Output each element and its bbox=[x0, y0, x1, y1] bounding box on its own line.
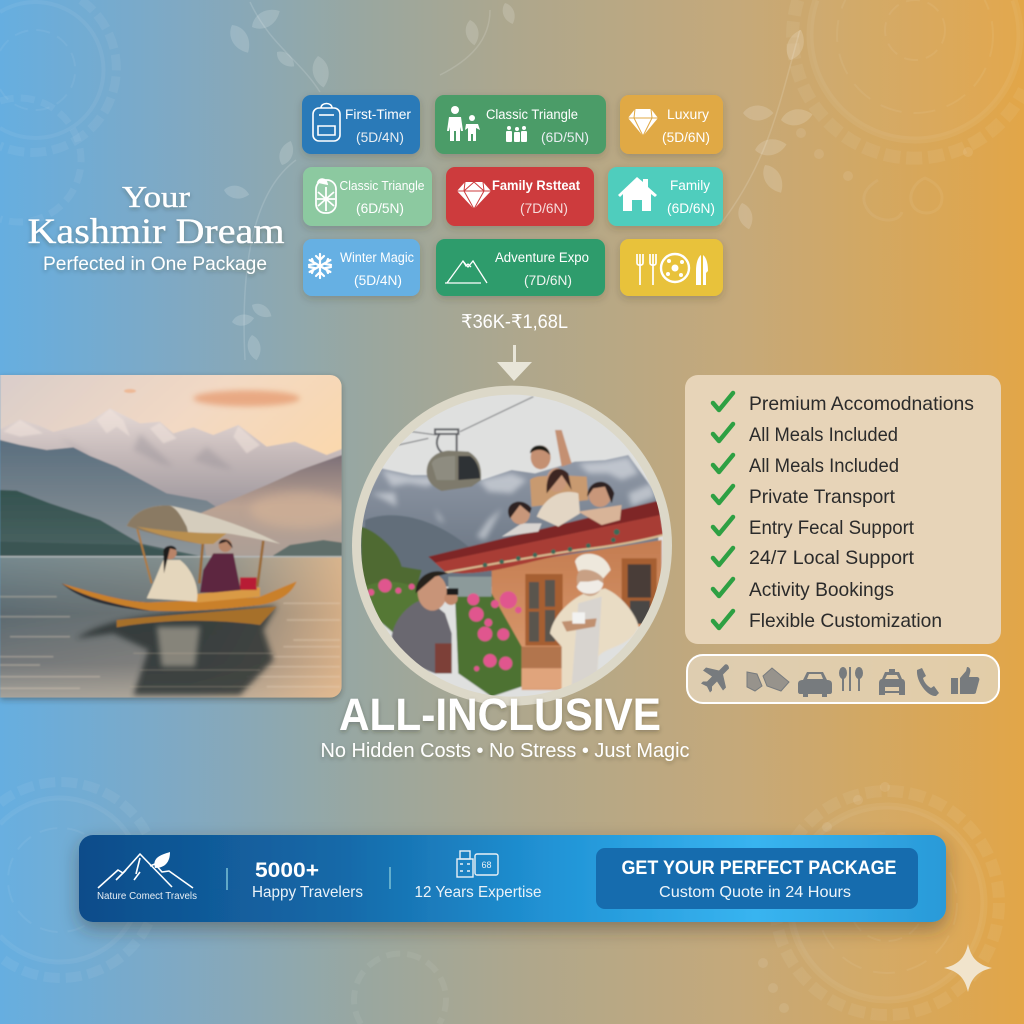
package tile: Luxury: (5D/6N) bbox=[662, 130, 710, 145]
sky bbox=[370, 394, 663, 696]
mid hills bbox=[0, 440, 233, 560]
photo ring bbox=[352, 386, 672, 706]
checklist text: Premium Accomodnations bbox=[749, 393, 974, 415]
checklist text: Private Transport bbox=[749, 486, 896, 508]
photo: shikara on the lake bbox=[0, 370, 350, 699]
sky bbox=[0, 374, 345, 456]
stat: happy travelers bbox=[252, 859, 363, 901]
icon: thumbs up bbox=[951, 667, 979, 694]
package tile: Adventure Expo: Adventure Expo bbox=[495, 250, 589, 265]
package tile: dining icon bbox=[620, 239, 723, 296]
package tile: Adventure Expo: (7D/6N) bbox=[524, 273, 572, 288]
stat: years expertise bbox=[414, 851, 542, 901]
passengers bbox=[147, 560, 198, 602]
icon: snowflake bbox=[309, 254, 331, 278]
shikara hull bbox=[62, 584, 150, 612]
title: Perfected in One Package bbox=[43, 253, 267, 275]
package tile: Classic Triangle bbox=[435, 95, 606, 154]
logo: Nature Connect Travels: Nature Comect Travels bbox=[97, 891, 197, 902]
window left bbox=[525, 574, 563, 646]
package tile: Classic Triangle: (6D/5N) bbox=[541, 130, 589, 145]
checklist text: All Meals Included bbox=[749, 424, 898, 446]
icon: fork, plate and knife bbox=[637, 254, 708, 285]
package tile: First-Timer: First-Timer bbox=[345, 107, 412, 122]
garden bbox=[367, 582, 420, 633]
stat: years expertise: 68 bbox=[481, 860, 492, 870]
icon: phone bbox=[917, 668, 939, 696]
stat: years expertise: 12 Years Expertise bbox=[414, 884, 542, 901]
package tile: Winter Magic: (5D/4N) bbox=[354, 273, 402, 288]
package tile: Family bbox=[608, 167, 723, 226]
checklist text: All Meals Included bbox=[749, 455, 899, 477]
woman with camera bbox=[392, 571, 458, 673]
package tile: Luxury: Luxury bbox=[667, 107, 709, 122]
package tile: Luxury bbox=[620, 95, 723, 154]
package tile: First-Timer bbox=[302, 95, 420, 154]
pink flowers bbox=[368, 579, 522, 671]
panel: inclusions checklist bbox=[685, 375, 1001, 644]
checkmarks bbox=[713, 393, 733, 628]
stat: happy travelers: 5000+ bbox=[255, 859, 319, 882]
package tile: Family: (6D/6N) bbox=[667, 201, 715, 216]
package tile: Adventure Expo bbox=[436, 239, 605, 296]
decorative leaves bbox=[223, 1, 814, 361]
stat: happy travelers: Happy Travelers bbox=[252, 884, 363, 901]
icon: mountain bbox=[445, 261, 487, 283]
checklist text: Activity Bookings bbox=[749, 579, 894, 601]
package tile: Classic Triangle green bbox=[303, 167, 432, 226]
snow mountains bbox=[358, 455, 658, 587]
logo: Nature Connect Travels bbox=[97, 852, 197, 902]
icon: small family bbox=[506, 126, 527, 142]
checklist text bbox=[749, 393, 974, 632]
package tile: Winter Magic bbox=[303, 239, 420, 296]
banner: call to action bbox=[79, 835, 946, 922]
button bbox=[596, 848, 918, 909]
boat reflection bbox=[77, 606, 277, 695]
lake bbox=[0, 556, 347, 699]
icon: ruby bbox=[457, 182, 491, 209]
icon: sparkle bbox=[944, 944, 992, 992]
roof bbox=[428, 500, 662, 564]
checklist text: 24/7 Local Support bbox=[749, 547, 915, 569]
window right bbox=[622, 558, 657, 624]
icon: diamond bbox=[628, 109, 658, 136]
snow peaks bbox=[0, 408, 343, 513]
icon: plane bbox=[701, 664, 729, 692]
icon: ornament bbox=[316, 179, 336, 213]
icon: house bbox=[618, 177, 657, 211]
icon: taxi bbox=[879, 669, 905, 695]
icon: car bbox=[798, 672, 832, 697]
house wall bbox=[492, 540, 662, 690]
title bbox=[28, 179, 284, 275]
package tile: Family Retreat bbox=[446, 167, 594, 226]
cable car bbox=[398, 397, 533, 491]
family on roof bbox=[502, 430, 622, 537]
package tile: First-Timer: (5D/4N) bbox=[356, 130, 404, 145]
heading: ALL-INCLUSIVE: ALL-INCLUSIVE bbox=[339, 689, 661, 740]
arrow bbox=[497, 345, 532, 381]
icon: family bbox=[447, 106, 480, 141]
icon: map bbox=[747, 668, 789, 691]
package tile: Classic Triangle green: Classic Triangle bbox=[340, 178, 424, 193]
icon: cutlery bbox=[839, 667, 863, 691]
price range: ₹36K-₹1,68L bbox=[461, 312, 568, 333]
button: Custom Quote in 24 Hours bbox=[659, 884, 851, 901]
checklist text: Flexible Customization bbox=[749, 610, 942, 632]
package tile: Family Retreat: Family Rstteat bbox=[492, 178, 580, 193]
package tile: Family Retreat: (7D/6N) bbox=[520, 201, 568, 216]
button: GET YOUR PERFECT PACKAGE bbox=[622, 857, 896, 879]
package tile: Classic Triangle: Classic Triangle bbox=[486, 107, 578, 122]
checklist text: Entry Fecal Support bbox=[749, 517, 915, 539]
icon: backpack bbox=[313, 104, 340, 141]
elder man bbox=[550, 554, 638, 690]
package tile: Winter Magic: Winter Magic bbox=[340, 250, 414, 265]
package tile: Family: Family bbox=[670, 178, 710, 193]
poles bbox=[137, 527, 152, 583]
package tile: Classic Triangle green: (6D/5N) bbox=[356, 201, 404, 216]
title: Kashmir Dream bbox=[28, 211, 284, 251]
subheading: No Hidden Costs • No Stress • Just Magic bbox=[320, 740, 690, 762]
panel: inclusion icons strip bbox=[687, 655, 999, 703]
circular photo: family in Kashmir bbox=[352, 386, 672, 706]
canopy bbox=[170, 505, 279, 544]
tree bbox=[361, 527, 422, 593]
title: Your bbox=[122, 179, 191, 214]
